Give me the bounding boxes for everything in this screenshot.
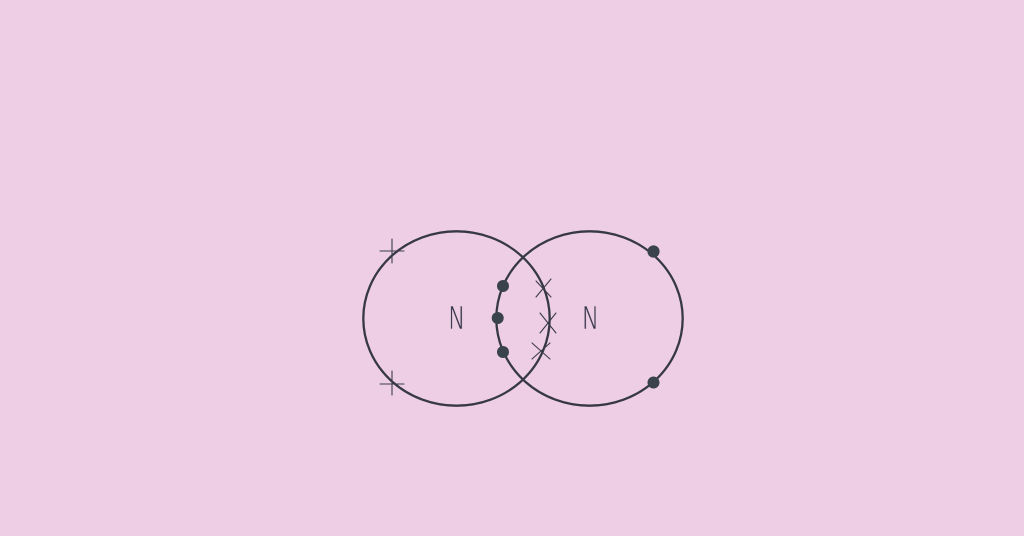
left atom label N: N [449,299,464,336]
dots in shared bonding region [492,280,509,358]
right atom shell [496,231,683,406]
dots on right atom outer shell [647,245,660,388]
right atom label N: N [583,299,598,336]
crosses in shared bonding region [532,279,556,359]
left atom shell [363,231,550,406]
crosses on left atom outer shell [380,239,404,395]
